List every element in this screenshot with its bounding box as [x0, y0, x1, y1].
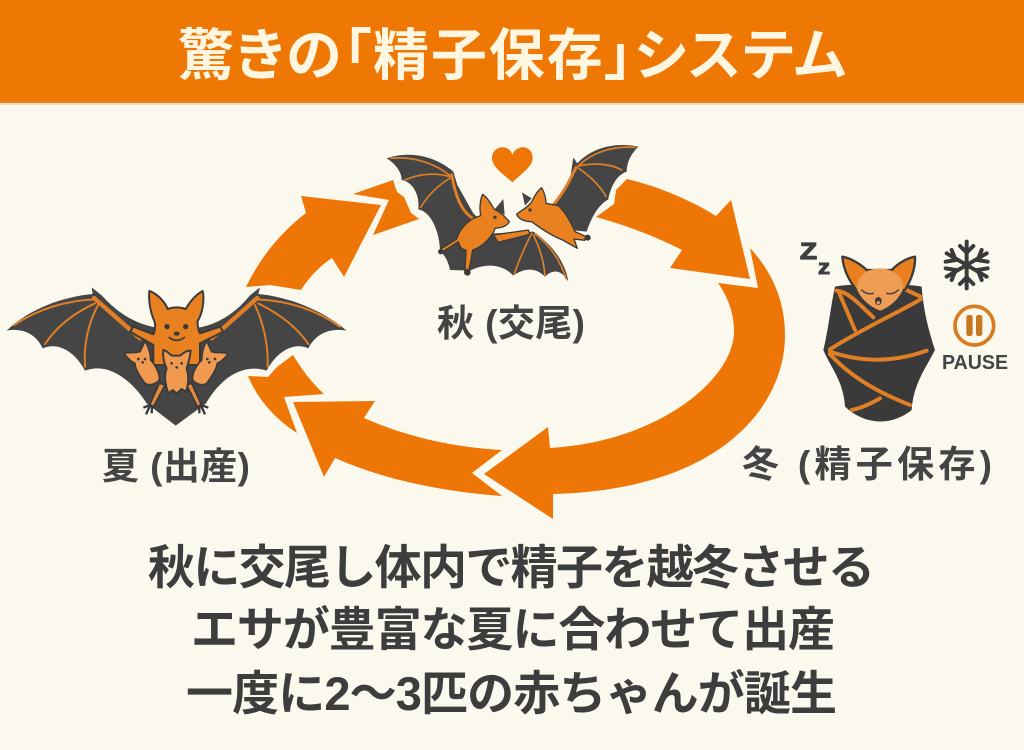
- header band: [0, 0, 1024, 105]
- arrow: summer tail piece: [248, 355, 324, 433]
- arrow: winter to summer: [484, 248, 785, 519]
- heart: [492, 147, 533, 182]
- line 3: 一度に2〜3匹の赤ちゃんが誕生: [186, 667, 837, 720]
- left dark ear: [495, 199, 505, 215]
- faces: [137, 324, 216, 369]
- label: summer: 夏 (出産): [102, 446, 250, 487]
- mother body and pups: [124, 291, 228, 414]
- left bat wings: [387, 155, 568, 282]
- right dark ear: [522, 192, 532, 206]
- label: autumn: 秋 (交尾): [437, 303, 585, 344]
- right bat bones: [554, 147, 635, 204]
- autumn bat bodies: [438, 188, 591, 276]
- eyes and feet: [438, 208, 591, 276]
- label: winter: 冬 (精子保存): [742, 444, 992, 485]
- wrap bands: [830, 289, 927, 410]
- arrow: summer to autumn: [246, 196, 381, 290]
- winter head: [842, 257, 915, 311]
- pup: centre: [163, 350, 191, 393]
- pup: right: [192, 341, 228, 385]
- title: 驚きの「精子保存」システム: [178, 24, 846, 87]
- arrow: autumn head piece: [353, 180, 419, 235]
- line 2: エサが豊富な夏に合わせて出産: [191, 603, 835, 656]
- arrow: winter to summer lower: [293, 401, 502, 496]
- pup: left: [124, 341, 159, 385]
- arrow: autumn to winter: [596, 179, 750, 279]
- legs: [149, 383, 202, 407]
- summary text: [148, 541, 875, 720]
- cycle arrows: [246, 179, 785, 519]
- bat: winter wrapped: [823, 242, 994, 421]
- sleep Z large: Z: [800, 238, 817, 264]
- lower wing arm: [493, 230, 530, 242]
- icon: snowflake: [946, 242, 988, 288]
- right bat body: [517, 188, 586, 248]
- sleep Z small: z: [818, 257, 830, 279]
- feet: [143, 405, 208, 414]
- bat: summer mother with pups: [7, 287, 347, 426]
- left bat bones: [391, 158, 566, 278]
- bats: autumn mating pair: [387, 145, 638, 282]
- line 1: 秋に交尾し体内で精子を越冬させる: [148, 541, 875, 594]
- left bat body: [441, 194, 509, 272]
- wings and bones: [7, 287, 347, 426]
- cocoon: [823, 284, 935, 421]
- body and head: [130, 291, 223, 365]
- PAUSE label: PAUSE: [942, 352, 1008, 374]
- icon: pause: [955, 306, 994, 345]
- right bat wing: [553, 145, 638, 232]
